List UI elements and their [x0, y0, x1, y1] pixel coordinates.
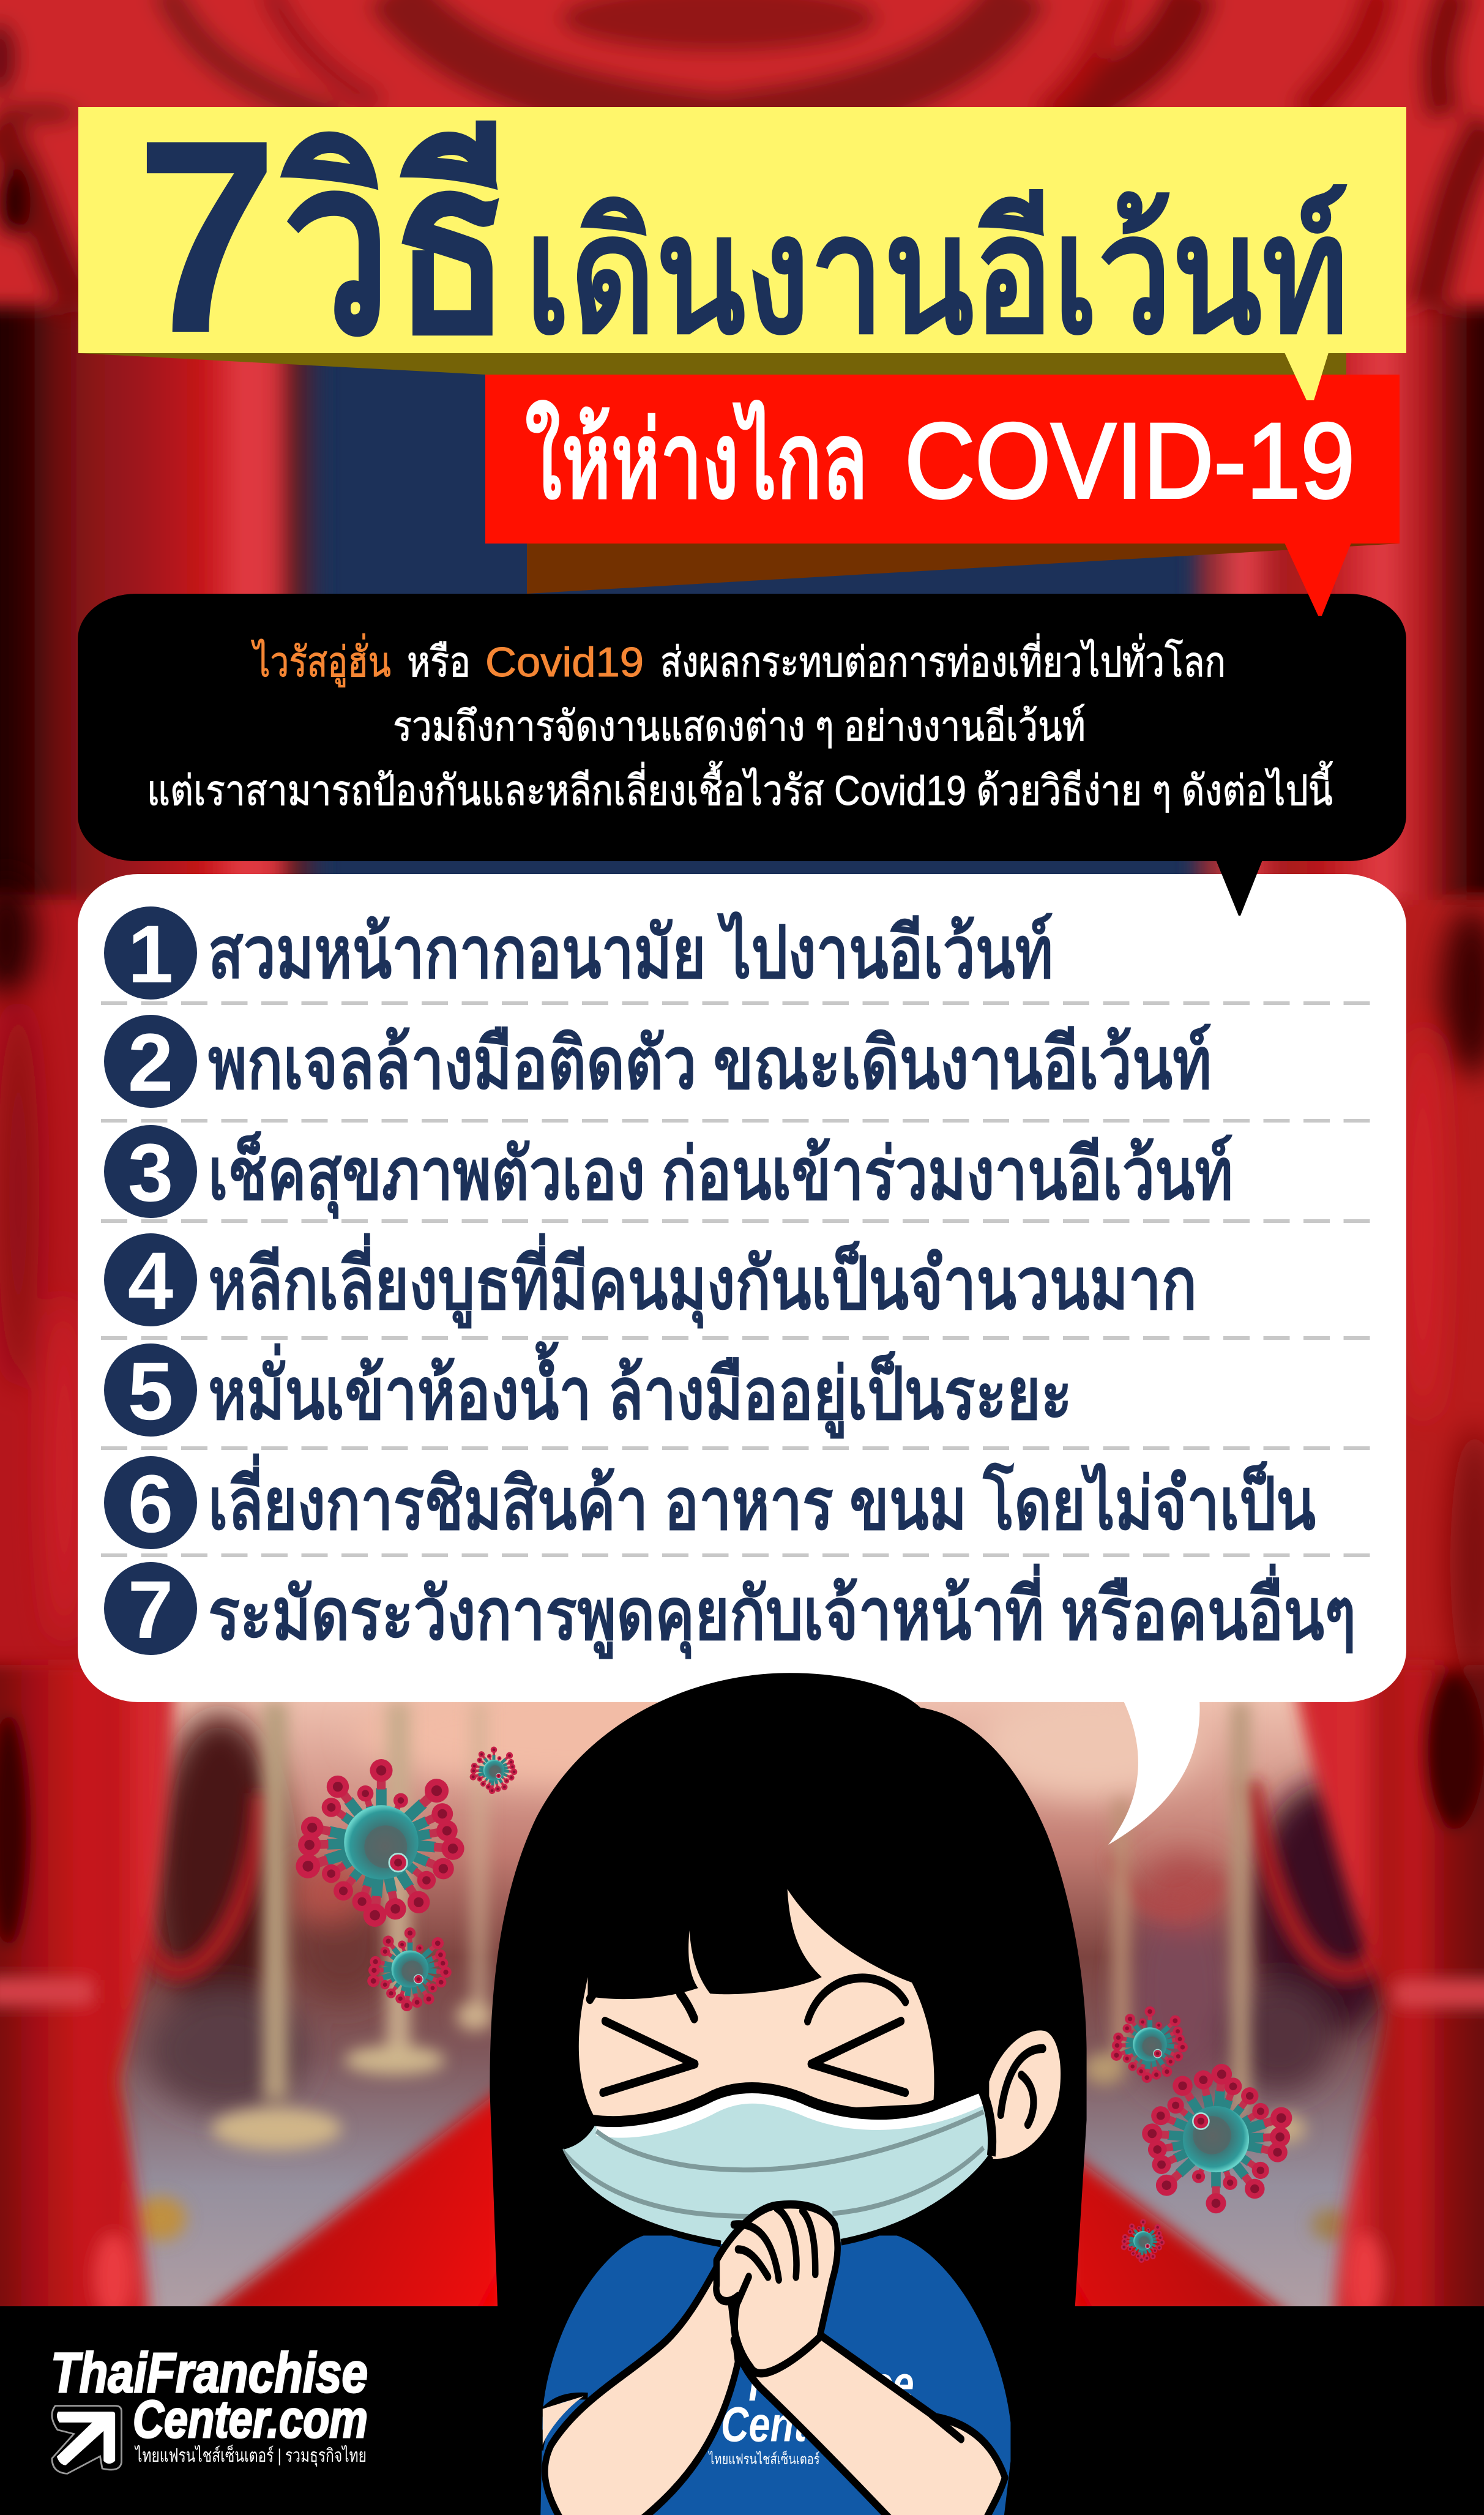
item 1 — [104, 906, 1053, 1000]
intro black bubble — [78, 594, 1406, 916]
character wearing mask — [490, 1673, 1087, 2515]
logo arrow — [52, 2406, 122, 2473]
footer logo — [51, 2342, 368, 2473]
item 4 — [104, 1233, 1197, 1329]
shirt logo text: Cent — [721, 2397, 808, 2452]
left scene curtain — [0, 1665, 174, 2323]
item 2: พกเจลล้างมือติดตัว ขณะเดินงานอีเว้นท์ — [208, 1023, 1212, 1104]
subtitle text: COVID-19 — [904, 402, 1355, 521]
right scene curtain — [1291, 1665, 1484, 2323]
virus large left — [293, 1759, 465, 1928]
brass stanchions — [105, 1702, 1351, 2241]
closed eyes — [603, 2021, 906, 2093]
item 3 — [104, 1125, 1233, 1219]
title word large: วิธี — [279, 110, 511, 384]
item 3: เช็คสุขภาพตัวเอง ก่อนเข้าร่วมงานอีเว้นท์ — [208, 1130, 1233, 1219]
black bubble pointer over list — [1216, 860, 1262, 916]
item 2 — [104, 1015, 1212, 1108]
virus large right — [1141, 2063, 1295, 2213]
item 4: 4 — [128, 1236, 173, 1327]
ear — [989, 2030, 1061, 2159]
rope swags — [132, 1781, 1392, 1972]
intro line 1: Covid19 — [485, 639, 644, 686]
virus tiny top — [469, 1747, 518, 1794]
intro line 1: ส่งผลกระทบต่อการท่องเที่ยวไปทั่วโลก — [660, 633, 1226, 686]
item 3: 3 — [128, 1127, 173, 1219]
subtitle text — [525, 400, 1355, 521]
item 7: 7 — [128, 1564, 173, 1656]
red carpet right — [1065, 2150, 1294, 2320]
intro line 2: รวมถึงการจัดงานแสดงต่าง ๆ อย่างงานอีเว้นท์ — [393, 703, 1086, 750]
shirt logo text: ce — [871, 2356, 914, 2412]
mask folds — [562, 2112, 983, 2216]
virus tiny right — [1120, 2219, 1165, 2263]
face — [579, 1889, 934, 2120]
intro line 1: ไวรัสอู่ฮั่น — [251, 633, 391, 687]
subtitle red banner — [485, 375, 1400, 594]
footer bar — [0, 2306, 1484, 2515]
right arm — [734, 2334, 1005, 2515]
item 5 — [104, 1341, 1072, 1439]
hair — [490, 1673, 1087, 2515]
white nose strip — [596, 2087, 985, 2138]
shirt logo text: T — [742, 2356, 769, 2412]
subtitle text: ให้ห่างไกล — [525, 400, 868, 521]
stage backdrop navy — [294, 343, 1212, 881]
item 4: หลีกเลี่ยงบูธที่มีคนมุงกันเป็นจำนวนมาก — [208, 1233, 1197, 1329]
mask outline — [592, 2087, 980, 2121]
virus small right — [1109, 2006, 1188, 2083]
shirt — [540, 2236, 1010, 2515]
intro line 1: หรือ — [407, 639, 471, 686]
left arm — [545, 2252, 738, 2515]
subtitle shadow — [527, 544, 1400, 594]
item 5: 5 — [128, 1346, 173, 1437]
item 6 — [104, 1454, 1316, 1550]
bubble pointer — [1216, 860, 1262, 916]
red carpet left — [199, 2084, 508, 2320]
top valance curtain — [0, 0, 1484, 306]
shirt logo text: ไทยแฟรนไชส์เซ็นเตอร์ — [708, 2450, 820, 2467]
item 1: 1 — [128, 909, 173, 1000]
intro line 3: แต่เราสามารถป้องกันและหลีกเลี่ยงเชื้อไวรัส Covid19 ด้วยวิธีง่าย ๆ ดังต่อไปนี้ — [147, 761, 1333, 814]
blurred red-carpet scene — [0, 1665, 1484, 2323]
speech tail — [1108, 1698, 1199, 1845]
shirt logo text — [708, 2356, 914, 2467]
title numeral: 7 — [136, 83, 278, 391]
logo wordmark: Center.com — [133, 2390, 368, 2449]
left side strip shading — [0, 875, 80, 1640]
face mask — [560, 2087, 992, 2248]
left sleeve — [540, 2396, 587, 2450]
banner shadow — [78, 353, 1346, 375]
logo wordmark — [51, 2342, 368, 2449]
title text — [136, 83, 1349, 391]
red banner pointer — [1285, 543, 1351, 616]
item 2: 2 — [128, 1017, 173, 1108]
praying hands — [716, 2205, 838, 2387]
title yellow banner — [78, 107, 1406, 375]
right side strip shading — [1406, 906, 1484, 1695]
logo tagline: ไทยแฟรนไชส์เซ็นเตอร์ | รวมธุรกิจไทย — [134, 2444, 367, 2467]
logo wordmark: ThaiFranchise — [51, 2342, 368, 2404]
virus small left — [366, 1927, 452, 2012]
item 5: หมั่นเข้าห้องน้ำ ล้างมืออยู่เป็นระยะ — [208, 1341, 1072, 1439]
eyebrows — [590, 1972, 694, 2019]
side curtains — [0, 288, 1484, 1769]
item 1: สวมหน้ากากอนามัย ไปงานอีเว้นท์ — [208, 911, 1053, 993]
intro line 1 — [251, 633, 1226, 687]
list white bubble — [78, 874, 1406, 1845]
yellow banner pointer — [1285, 353, 1329, 400]
item 6: 6 — [128, 1459, 173, 1550]
